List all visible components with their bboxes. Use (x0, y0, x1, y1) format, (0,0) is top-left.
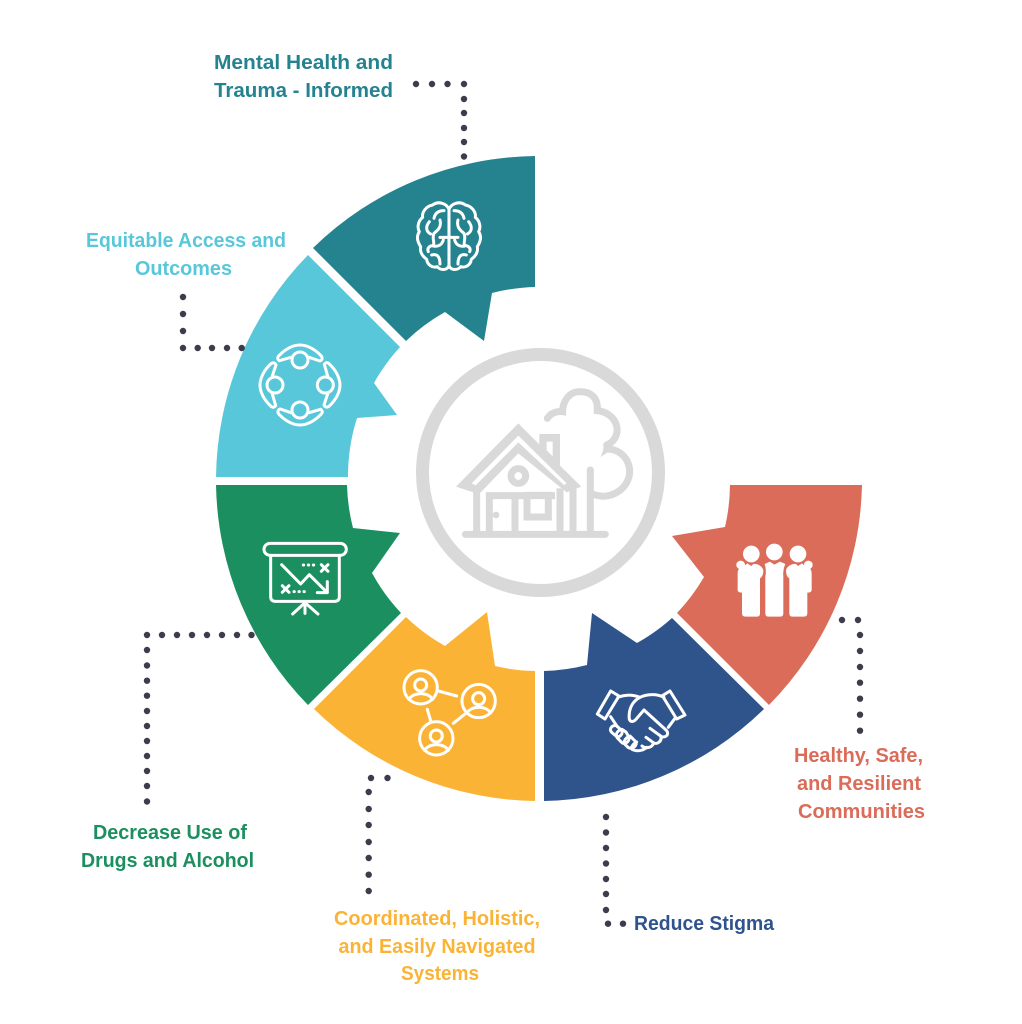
label: decrease use: Drugs and Alcohol (81, 850, 254, 872)
label: healthy communities (794, 745, 925, 823)
dotted connector: mental health (413, 81, 467, 160)
label: equitable access: Outcomes (135, 258, 232, 280)
panel: equitable access segment (216, 255, 400, 477)
panel: mental health segment (313, 156, 535, 341)
label: coordinated systems: Coordinated, Holistic, (334, 908, 540, 930)
icon: connected people network (404, 671, 495, 755)
label: healthy communities: and Resilient (797, 773, 921, 795)
label: mental health (214, 52, 393, 102)
icon: house and tree (456, 392, 630, 534)
label: mental health: Mental Health and (214, 52, 393, 74)
dotted connector: equitable access (180, 294, 245, 351)
dotted connector: healthy communities (839, 617, 863, 734)
label: coordinated systems: and Easily Navigated (338, 936, 536, 958)
center emblem: house and tree in circle (422, 354, 658, 590)
label: decrease use: Decrease Use of (93, 822, 247, 844)
panel: reduce stigma segment (544, 613, 764, 801)
dotted connector: coordinated systems (366, 775, 391, 894)
label: mental health: Trauma - Informed (214, 80, 393, 102)
label: coordinated systems: Systems (401, 963, 479, 985)
dotted connector: decrease use (144, 632, 255, 805)
label: healthy communities: Communities (798, 801, 925, 823)
label: equitable access (86, 230, 286, 280)
dotted connector: reduce stigma (603, 814, 626, 927)
icon: presentation board with falling chart (264, 543, 346, 614)
label: reduce stigma: Reduce Stigma (634, 913, 775, 935)
icon: handshake (597, 691, 685, 751)
icon: brain (417, 203, 481, 269)
panel: decrease use segment (216, 485, 401, 705)
panel: healthy communities segment (672, 485, 862, 705)
panel: coordinated systems segment (314, 612, 535, 801)
label: equitable access: Equitable Access and (86, 230, 286, 252)
icon: four people in a circle (260, 345, 340, 425)
label: decrease use (81, 822, 254, 872)
label: coordinated systems (334, 908, 540, 985)
icon: three people standing (736, 544, 813, 617)
label: healthy communities: Healthy, Safe, (794, 745, 923, 767)
